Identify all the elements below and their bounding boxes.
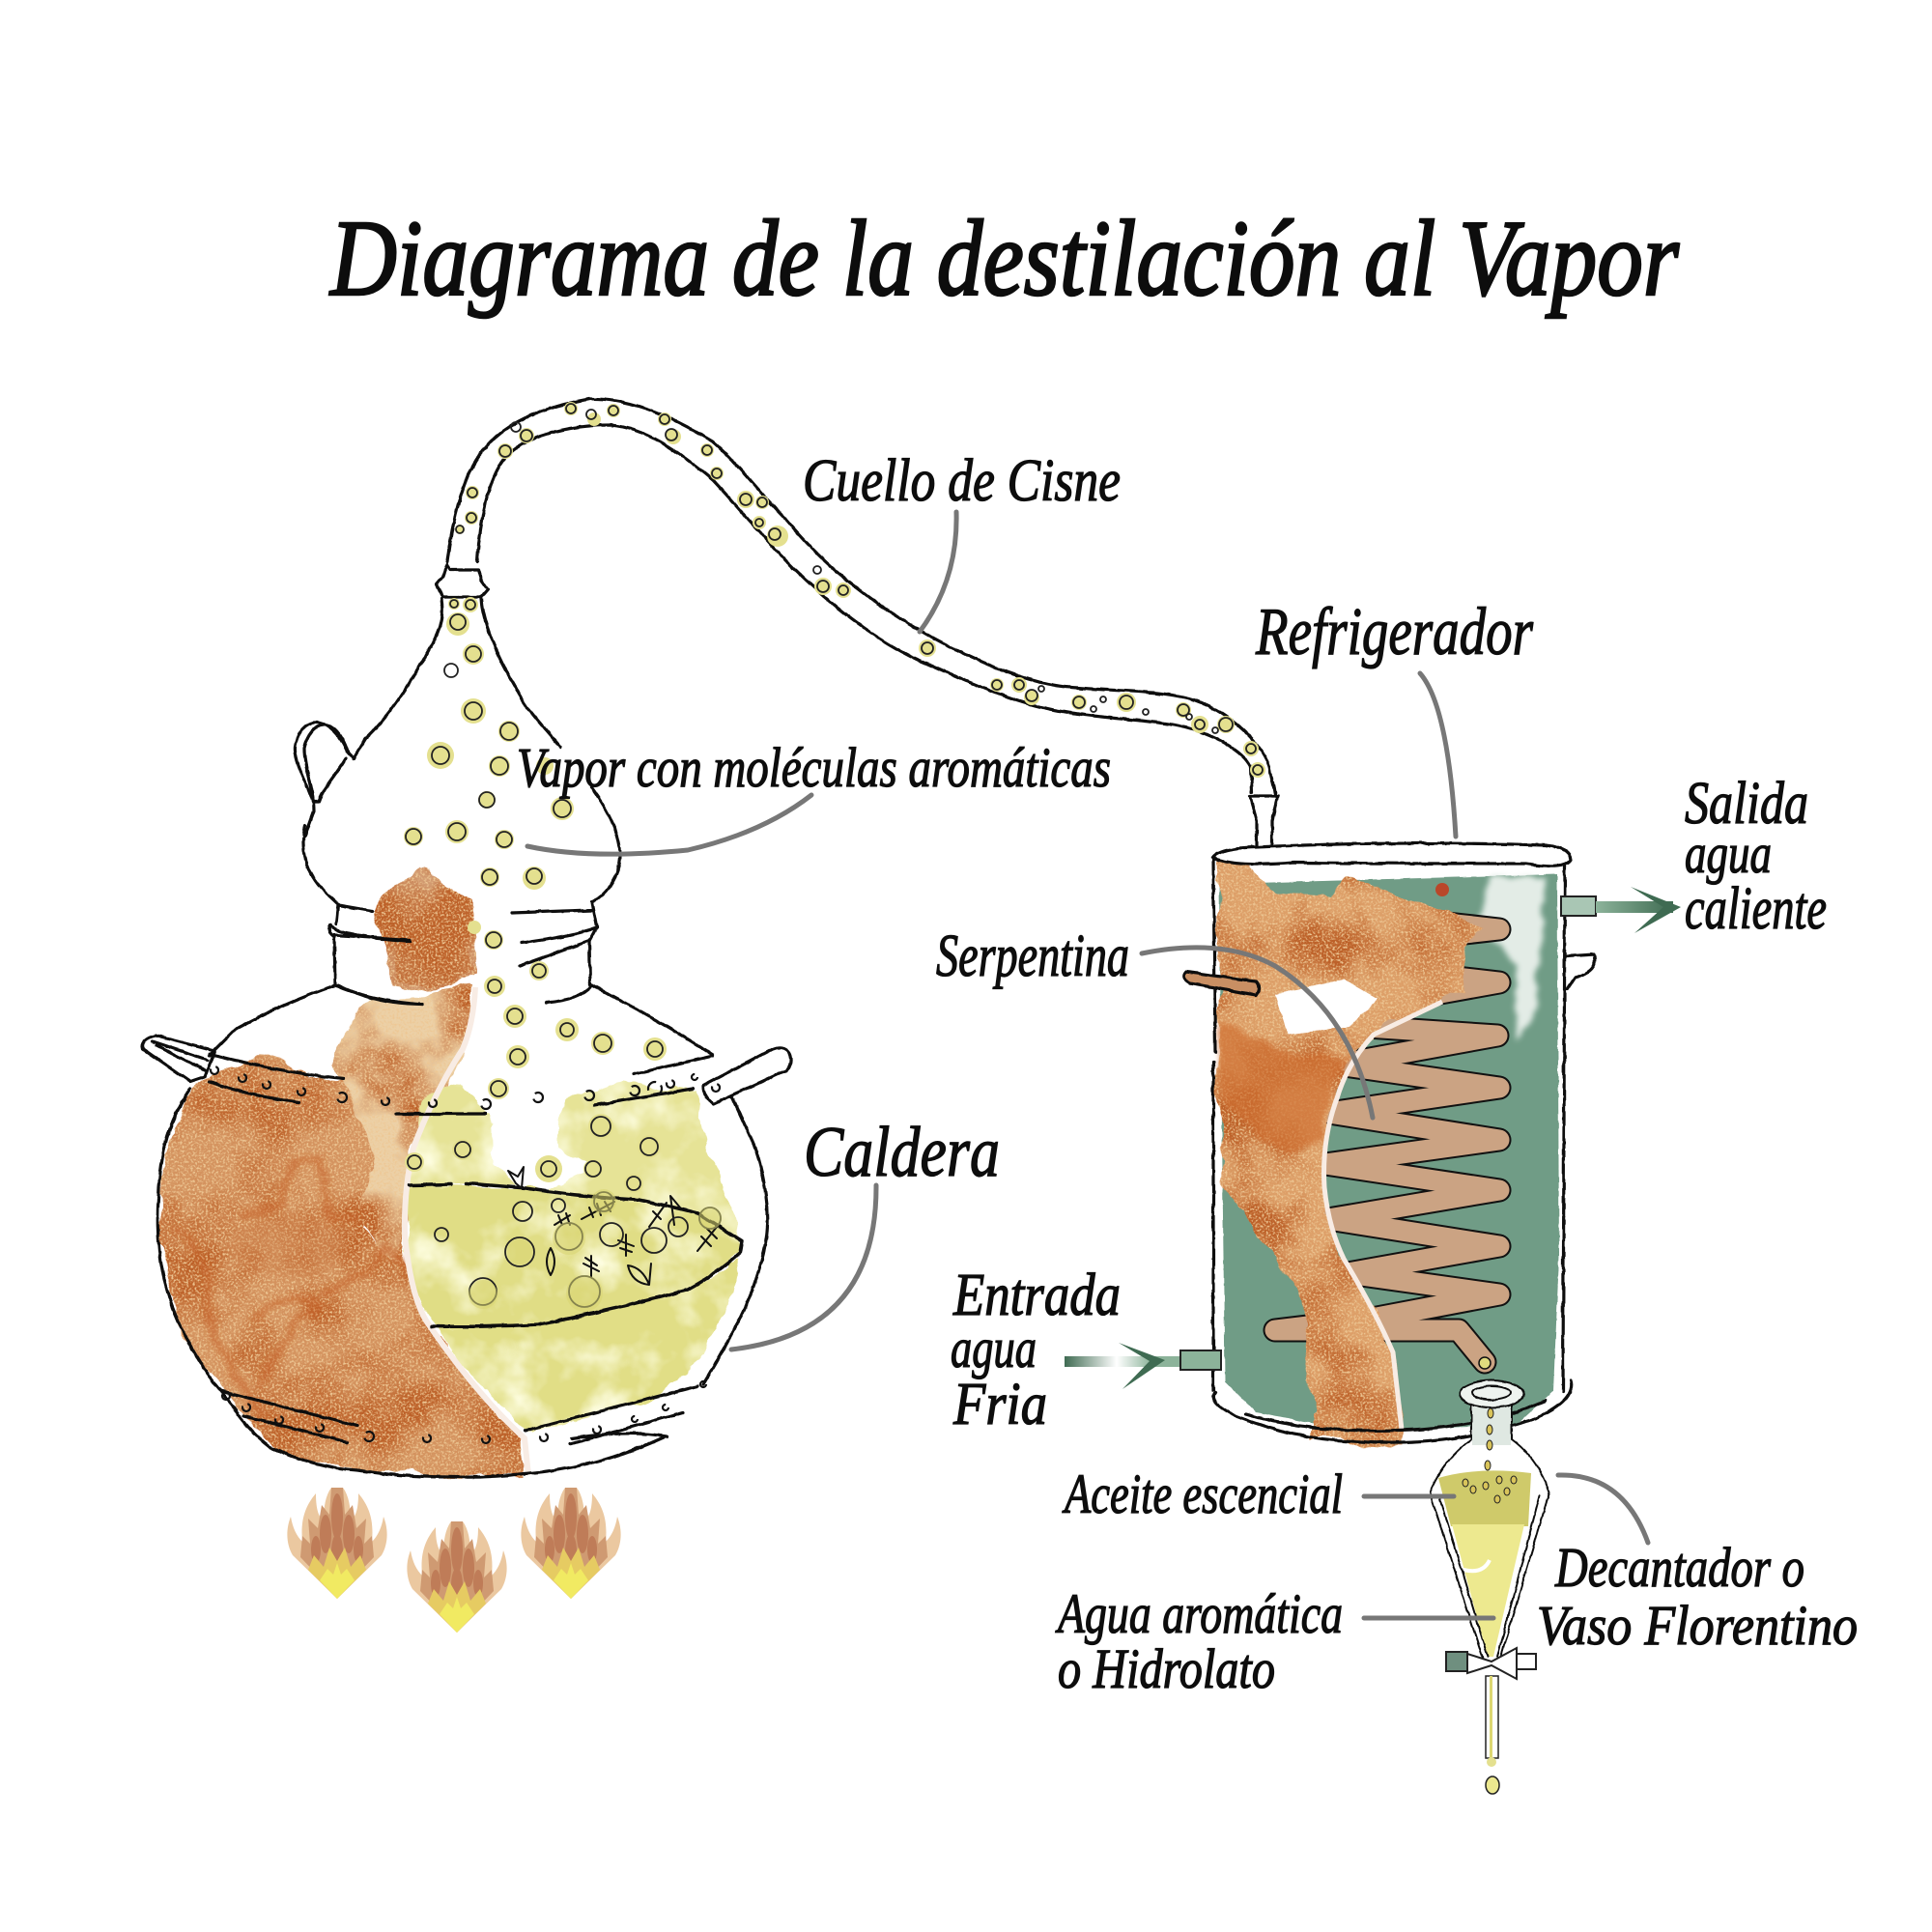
- white window in copper: [1275, 980, 1378, 1035]
- left handle: [143, 1036, 214, 1082]
- white divider: [1324, 1002, 1442, 1430]
- bubble shades in liquid: [469, 1189, 722, 1312]
- oil layer: [1438, 1470, 1531, 1526]
- line 2: Vaso Florentino: [1537, 1594, 1858, 1657]
- shaft: [1065, 1356, 1180, 1367]
- herbs and sprigs: [508, 1167, 717, 1285]
- label: agua aromatica: [1055, 1582, 1343, 1700]
- pale highlight in water: [1478, 877, 1546, 1043]
- leader: decantador: [1558, 1475, 1648, 1543]
- spout: [1486, 1676, 1498, 1767]
- collar left: [329, 925, 411, 985]
- head left: [303, 599, 442, 924]
- coil fill: [1275, 922, 1499, 1362]
- leader: aceite: [1364, 1493, 1454, 1499]
- stopcock: [1446, 1648, 1536, 1679]
- flame 2: [407, 1521, 507, 1633]
- label: caldera: Caldera: [804, 1113, 1000, 1192]
- boiler washes: [158, 867, 742, 1476]
- white divider: [405, 987, 528, 1475]
- leader: caldera: [731, 1185, 876, 1350]
- green water: [1219, 874, 1559, 1432]
- head right: [481, 599, 620, 985]
- inlet stub left: [1184, 972, 1259, 995]
- title: Diagrama de la destilación al Vapor: [328, 199, 1679, 319]
- outlet arrow: hot water: [1561, 887, 1681, 933]
- darker copper on condenser: [1219, 1024, 1348, 1154]
- flames: [287, 1488, 621, 1633]
- shaft: [1596, 901, 1673, 913]
- outlet stub: [1561, 896, 1596, 916]
- copper wash on condenser: [1214, 858, 1482, 1445]
- mouth: [1460, 1380, 1523, 1407]
- wall left: [1213, 858, 1215, 1391]
- spot: [1435, 883, 1449, 896]
- agua: agua: [1685, 822, 1772, 885]
- wall right: [1563, 862, 1565, 1391]
- copper patch on helmet: [375, 867, 473, 990]
- flame 3: [521, 1488, 621, 1599]
- highlight: [1463, 1560, 1490, 1571]
- illustration: boiler (caldera): [143, 867, 791, 1477]
- line 1: Agua aromática: [1055, 1582, 1343, 1645]
- caliente: caliente: [1685, 876, 1827, 942]
- label: vapor: Vapor con moléculas aromáticas: [517, 736, 1111, 799]
- rivets: [211, 1066, 720, 1443]
- helmet lid neck: [338, 985, 422, 1005]
- neck lower tube: [1250, 796, 1278, 862]
- oil drops: [1463, 1408, 1517, 1503]
- hook right: [1567, 954, 1595, 989]
- flame 1: [287, 1488, 387, 1599]
- label: aceite escencial: Aceite escencial: [1062, 1463, 1343, 1525]
- stem glass tint: [1472, 1406, 1511, 1445]
- condenser outline: [1184, 843, 1595, 1443]
- illustration: helmet (capitel): [295, 564, 620, 1005]
- leader: agua aromatica: [1364, 1615, 1493, 1621]
- hydrolate layer: [1452, 1524, 1524, 1657]
- yellow upper wash left: [411, 1080, 514, 1188]
- liquid surface: [410, 1183, 742, 1326]
- boiler outline: [143, 985, 791, 1477]
- collar right: [520, 927, 597, 966]
- shoulder: [210, 985, 713, 1055]
- leader: cuello de cisne: [920, 512, 956, 632]
- line 2: o Hidrolato: [1058, 1637, 1275, 1700]
- yellow herbs band: [405, 1186, 742, 1326]
- leader: serpentina: [1142, 948, 1373, 1118]
- label: cuello de cisne: Cuello de Cisne: [803, 448, 1121, 514]
- copper shade: [232, 1213, 348, 1279]
- base: [1213, 1379, 1572, 1443]
- copper wash: [158, 1056, 528, 1476]
- serpentine coil: [1275, 922, 1499, 1362]
- glass body: [1430, 1405, 1549, 1662]
- right handle: [703, 1047, 791, 1104]
- label: serpentina: Serpentina: [936, 923, 1129, 989]
- neck outlines: [447, 399, 1278, 862]
- body: [157, 1089, 768, 1477]
- label: salida agua caliente: [1685, 771, 1827, 942]
- glass outline: [1430, 1380, 1549, 1662]
- label: entrada agua fria: [951, 1263, 1121, 1437]
- leader: refrigerador: [1420, 673, 1456, 837]
- yellow upper wash right: [541, 1082, 742, 1246]
- agua: agua: [951, 1317, 1037, 1379]
- label: refrigerador: Refrigerador: [1255, 595, 1534, 669]
- illustration: condenser (refrigerador): [1184, 843, 1595, 1445]
- helmet outline: [295, 564, 620, 1005]
- decanter: [1430, 1380, 1549, 1794]
- salida: Salida: [1685, 771, 1808, 837]
- label: decantador: [1537, 1536, 1858, 1657]
- head: [1119, 1343, 1165, 1389]
- vapour bubbles: [404, 402, 1265, 1312]
- inlet arrow: cold water: [1065, 1343, 1221, 1389]
- bands: [210, 1054, 713, 1444]
- line 1: Decantador o: [1554, 1536, 1804, 1599]
- fria: Fria: [952, 1372, 1047, 1437]
- lid bottom joint: [437, 564, 488, 597]
- illustration: swan neck tube: [447, 399, 1278, 862]
- rim: [1212, 843, 1571, 866]
- inlet stub: [1180, 1350, 1221, 1370]
- leader: vapor: [527, 795, 811, 854]
- entrada: Entrada: [952, 1263, 1121, 1328]
- coil outline: [1275, 922, 1499, 1362]
- darker patch on helmet: [391, 903, 469, 985]
- copper cream wash: [333, 985, 473, 1265]
- bubble outlines: [406, 404, 1263, 1307]
- bubble fills: [404, 402, 1265, 1193]
- drain drop: [1479, 1357, 1491, 1369]
- jug handle: [295, 723, 365, 836]
- yellow liquid bottom: [432, 1261, 738, 1432]
- darker copper veins: [172, 1159, 412, 1420]
- drop: [1486, 1776, 1499, 1794]
- head: [1631, 887, 1681, 933]
